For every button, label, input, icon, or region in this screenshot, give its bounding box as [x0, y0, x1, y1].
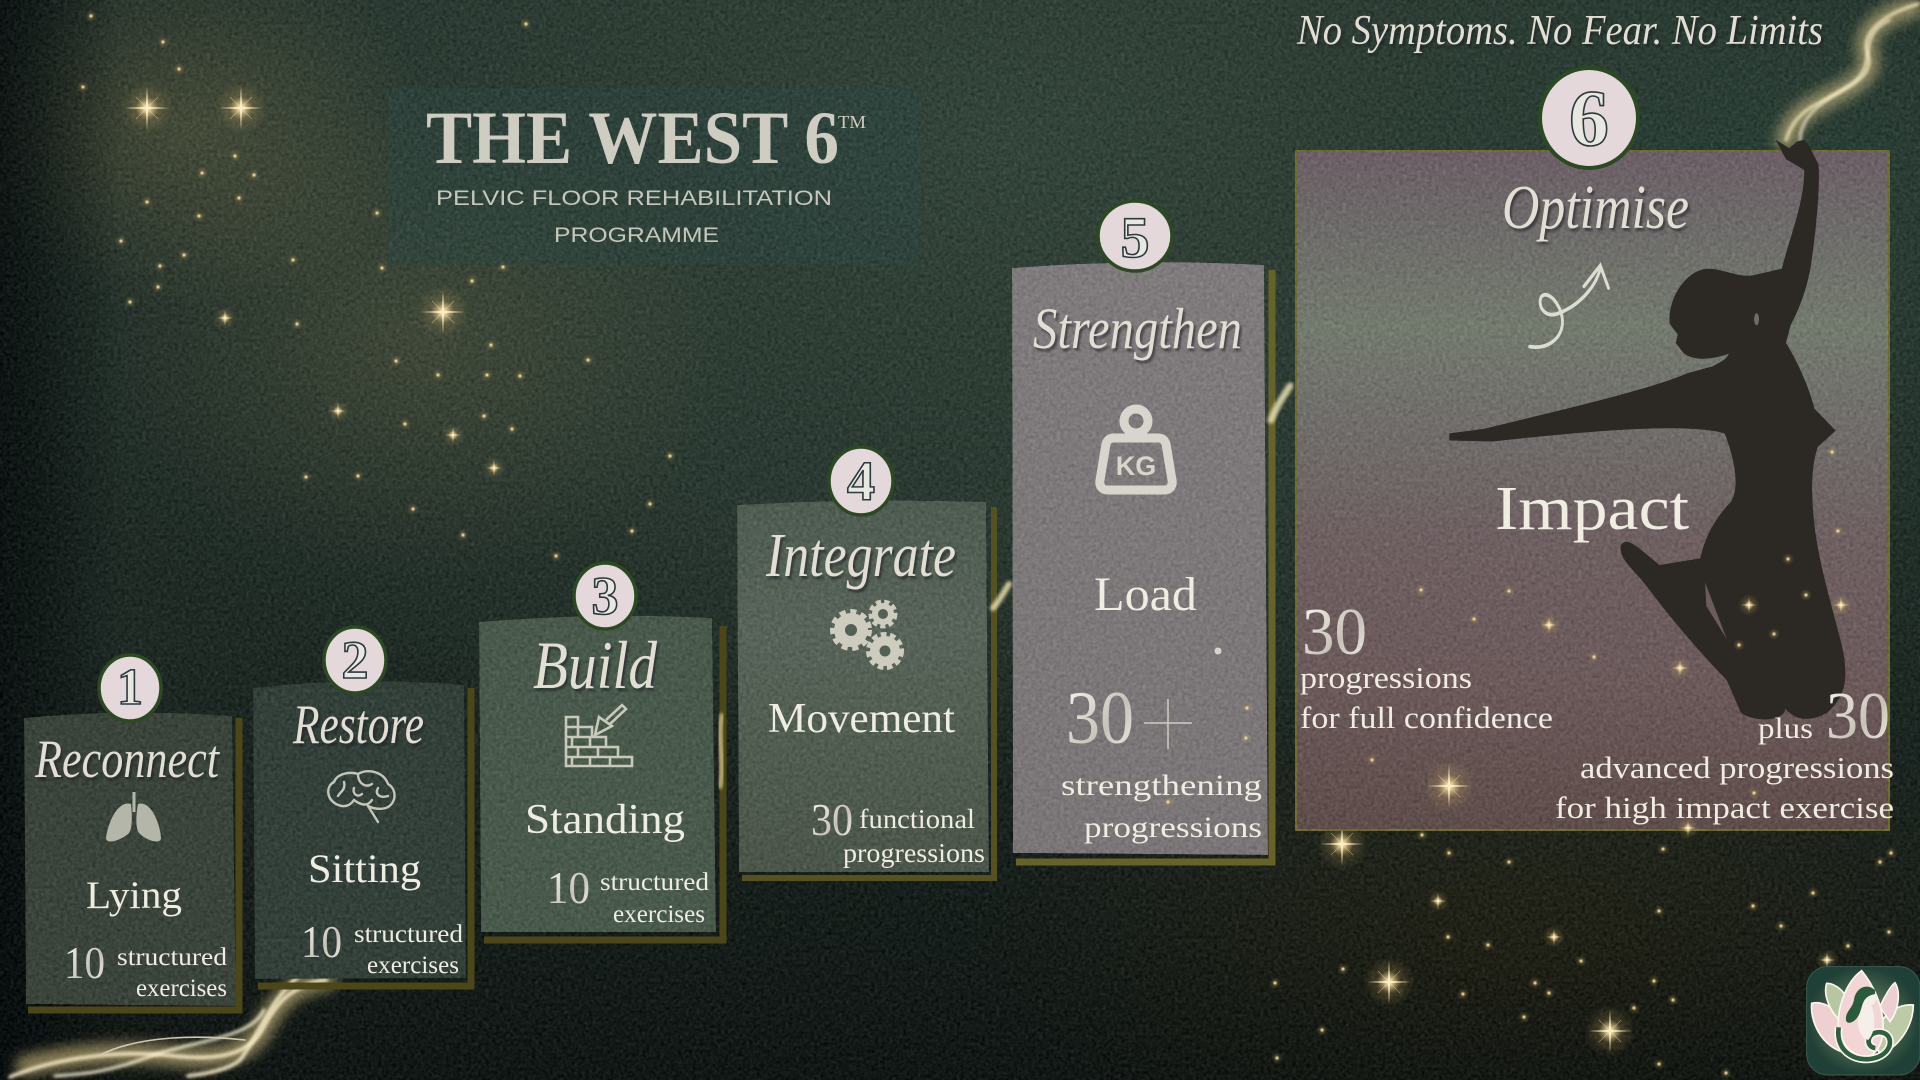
text: progressions for full confidence: for full confidence — [1300, 700, 1553, 735]
count 30+ — [1066, 677, 1192, 760]
count 10: 10 — [64, 938, 105, 988]
count 30: 30 — [811, 795, 853, 845]
heading: Integrate: Integrate — [765, 522, 956, 590]
text: advanced progressions — [1555, 750, 1894, 825]
count plus 30 right — [1758, 679, 1890, 753]
title: THE WEST 6 — [426, 97, 839, 180]
badge 4: 4 — [847, 451, 875, 513]
text: structured exercises: exercises — [136, 975, 227, 1002]
badge 3: 3 — [592, 566, 618, 626]
light ribbon: top right — [1786, 4, 1918, 140]
text: advanced progressions: advanced progressions — [1580, 750, 1894, 785]
subtitle line 2: PROGRAMME — [554, 223, 719, 247]
label: Standing: Standing — [525, 797, 685, 843]
icon: brick wall and trowel — [566, 705, 632, 766]
panel: step 5 Strengthen — [1012, 201, 1272, 862]
heading: Optimise: Optimise — [1502, 174, 1689, 242]
text: structured exercises: exercises — [367, 952, 459, 979]
heading: Strengthen: Strengthen — [1033, 296, 1242, 361]
text: structured exercises: structured — [354, 921, 464, 948]
heading: Reconnect: Reconnect — [34, 729, 221, 789]
label: Load: Load — [1094, 568, 1197, 621]
text: structured exercises — [354, 921, 464, 979]
heading: Restore: Restore — [292, 694, 424, 756]
icon: gears — [833, 602, 901, 667]
badge 2 — [324, 627, 386, 693]
count plus 30 right: 30 — [1826, 679, 1890, 753]
stars: upper left field — [77, 10, 676, 562]
text: strengthening progressions: strengthening — [1061, 769, 1262, 802]
icon: upward swirl arrow — [1530, 265, 1608, 347]
text: strengthening progressions — [1061, 769, 1262, 844]
text: structured exercises: exercises — [613, 901, 705, 928]
text: advanced progressions: for high impact exercise — [1555, 790, 1894, 825]
text: structured exercises: structured — [117, 944, 228, 971]
badge 1 — [99, 655, 161, 721]
label: Lying: Lying — [86, 874, 182, 917]
badge 2: 2 — [342, 630, 368, 690]
badge 6 — [1540, 68, 1638, 168]
icon: brain — [328, 771, 395, 822]
stars over panel — [1366, 446, 1852, 839]
light ribbon: bottom left — [10, 975, 326, 1077]
count 30+: 30 — [1066, 677, 1134, 760]
text: progressions for full confidence: progressions — [1300, 660, 1472, 695]
light ribbons: between steps — [472, 386, 1290, 856]
badge 5 — [1098, 201, 1172, 271]
badge 3 — [574, 563, 636, 629]
label: Sitting: Sitting — [308, 846, 421, 891]
label: Movement: Movement — [768, 696, 955, 742]
text: structured exercises — [117, 944, 228, 1002]
badge 5: 5 — [1120, 205, 1150, 270]
badge 1: 1 — [117, 659, 143, 716]
tagline: No Symptoms. No Fear. No Limits — [1296, 8, 1823, 54]
text: functional progressions: functional — [859, 804, 975, 834]
count 30 left: 30 — [1302, 595, 1367, 669]
subtitle line 1: PELVIC FLOOR REHABILITATION — [436, 186, 832, 210]
text: progressions for full confidence — [1300, 660, 1553, 735]
text: functional progressions: progressions — [843, 838, 985, 868]
text: functional progressions — [843, 804, 985, 868]
silhouette: jumping woman — [1449, 140, 1845, 719]
panel: step 1 Reconnect — [24, 655, 239, 1010]
badge 6: 6 — [1569, 75, 1609, 163]
trademark: TM — [838, 112, 866, 132]
text: strengthening progressions: progressions — [1084, 811, 1262, 844]
badge 4 — [829, 447, 893, 515]
count 10: 10 — [547, 863, 590, 913]
panel: step 4 Integrate — [737, 447, 994, 878]
icon: lotus logo — [1807, 967, 1920, 1075]
title panel — [388, 88, 918, 265]
panel: step 6 Optimise — [1295, 68, 1894, 839]
stars: lower right field — [1269, 818, 1897, 1079]
count 10: 10 — [301, 917, 342, 967]
icon: KG weight: KG — [1116, 451, 1156, 481]
text: structured exercises — [600, 869, 710, 928]
label: Impact: Impact — [1495, 475, 1689, 543]
count plus 30 right: plus — [1758, 712, 1813, 745]
text: structured exercises: structured — [600, 869, 710, 896]
panel: step 3 Build — [479, 563, 723, 940]
icon: lungs — [106, 792, 161, 841]
heading: Build: Build — [533, 627, 658, 703]
icon: KG weight — [1100, 409, 1172, 490]
panel: step 2 Restore — [253, 627, 471, 986]
